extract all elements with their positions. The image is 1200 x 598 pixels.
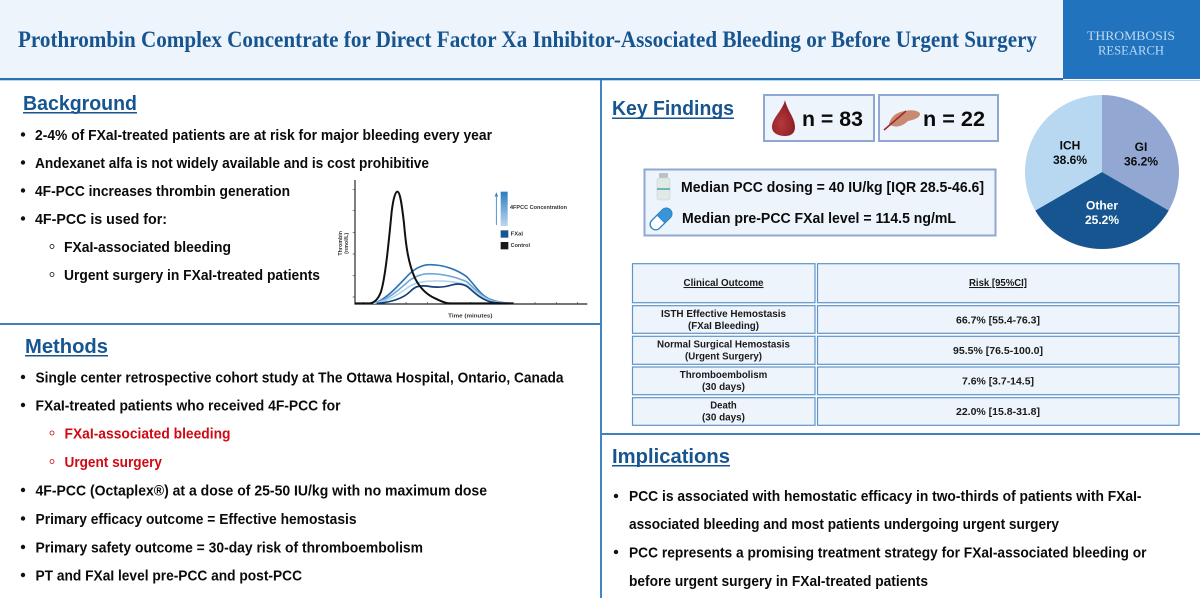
table: clinical outcomes: 7.6% [3.7-14.5]: [962, 376, 1034, 388]
table: clinical outcomes: (Urgent Surgery): [685, 352, 762, 362]
title: Prothrombin Complex Concentrate for Direct Factor Xa Inhibitor-Associated Bleeding or Before Urgent Surgery: [18, 27, 1037, 52]
implications bullets: PCC is associated with hemostatic efficacy in two-thirds of patients with FXaI-: [629, 488, 1142, 505]
legend: 4FPCC Concentration: [510, 205, 567, 211]
panel: implications: [612, 445, 1147, 590]
stat box: surgery n=22: n = 22: [923, 107, 985, 131]
background bullets: Urgent surgery in FXaI-treated patients: [64, 267, 320, 284]
methods bullets: 4F-PCC (Octaplex®) at a dose of 25-50 IU/kg with no maximum dose: [36, 482, 487, 500]
pie chart: bleeding site: ICH: [1060, 138, 1080, 152]
pie chart: bleeding site: Other: [1086, 198, 1118, 212]
legend: FXaI: [511, 231, 524, 237]
chart: thrombin generation curves: [338, 180, 587, 319]
methods bullets: Urgent surgery: [64, 454, 163, 471]
heading: key findings: Key Findings: [612, 97, 734, 120]
stat box: surgery n=22: [879, 95, 998, 141]
stat box: bleeding n=83: n = 83: [802, 107, 863, 131]
heading: implications: Implications: [612, 445, 730, 468]
legend: Control: [511, 243, 531, 249]
methods bullets: Primary efficacy outcome = Effective hemostasis: [36, 511, 356, 528]
methods bullets: Single center retrospective cohort study at The Ottawa Hospital, Ontario, Canada: [36, 370, 564, 386]
implications bullets: PCC represents a promising treatment strategy for FXaI-associated bleeding or: [629, 544, 1147, 562]
table: clinical outcomes: Normal Surgical Hemostasis: [657, 340, 790, 350]
table: clinical outcomes: (FXaI Bleeding): [688, 321, 759, 332]
background bullets: 4F-PCC increases thrombin generation: [35, 183, 290, 200]
pie chart: bleeding site: [1025, 95, 1179, 249]
icon: hand with scalpel: [884, 110, 920, 130]
table: clinical outcomes: (30 days): [702, 382, 745, 393]
table: clinical outcomes: [632, 264, 1179, 425]
panel: methods: [21, 335, 564, 584]
heading: methods: Methods: [25, 335, 108, 358]
header banner: [0, 0, 1200, 81]
table: clinical outcomes: 22.0% [15.8-31.8]: [956, 407, 1040, 418]
panel: key findings: [612, 95, 1179, 425]
background bullets: 4F-PCC is used for:: [35, 211, 167, 228]
background bullets: [21, 127, 492, 284]
table: clinical outcomes: 66.7% [55.4-76.3]: [956, 316, 1040, 326]
pie chart: bleeding site: 38.6%: [1053, 153, 1087, 167]
pie chart: bleeding site: GI: [1135, 140, 1147, 154]
background bullets: FXaI-associated bleeding: [64, 239, 231, 256]
stat box: median dosing and level: [644, 170, 996, 236]
axis labels: Time (minutes): [448, 313, 493, 319]
journal logo: [1087, 28, 1175, 58]
icon: capsule: [648, 206, 674, 232]
stat box: median dosing and level: Median pre-PCC FXaI level = 114.5 ng/mL: [682, 211, 956, 227]
methods bullets: FXaI-treated patients who received 4F-PCC for: [36, 398, 341, 414]
heading: background: Background: [23, 92, 137, 115]
journal logo: RESEARCH: [1098, 42, 1164, 58]
table: clinical outcomes: Thromboembolism: [680, 370, 767, 381]
implications bullets: [614, 488, 1147, 590]
icon: blood drop: [772, 100, 795, 136]
table: clinical outcomes: ISTH Effective Hemostasis: [661, 309, 786, 320]
axis labels: [338, 231, 493, 319]
methods bullets: [21, 370, 564, 584]
icon: vial: [657, 173, 670, 200]
axis labels: Thrombin: [338, 231, 344, 256]
table: clinical outcomes: Risk [95%CI]: [969, 278, 1027, 289]
stat box: median dosing and level: Median PCC dosing = 40 IU/kg [IQR 28.5-46.6]: [681, 180, 984, 196]
implications bullets: before urgent surgery in FXaI-treated patients: [629, 573, 928, 590]
table: clinical outcomes: Death: [710, 400, 737, 412]
implications bullets: associated bleeding and most patients undergoing urgent surgery: [629, 516, 1060, 533]
journal logo: THROMBOSIS: [1087, 28, 1175, 43]
pie chart: bleeding site: 25.2%: [1085, 213, 1119, 227]
stat box: bleeding n=83: [764, 95, 874, 141]
table: clinical outcomes: (30 days): [702, 412, 745, 424]
pie chart: bleeding site: 36.2%: [1124, 154, 1158, 168]
background bullets: 2-4% of FXaI-treated patients are at risk for major bleeding every year: [35, 127, 492, 144]
panel: background: [21, 92, 587, 319]
axis labels: (nmol/L): [344, 233, 350, 254]
methods bullets: PT and FXaI level pre-PCC and post-PCC: [36, 568, 302, 584]
methods bullets: Primary safety outcome = 30-day risk of thromboembolism: [36, 540, 423, 556]
table: clinical outcomes: Clinical Outcome: [684, 278, 764, 289]
legend: [495, 192, 567, 249]
table: clinical outcomes: 95.5% [76.5-100.0]: [953, 346, 1043, 357]
methods bullets: FXaI-associated bleeding: [64, 426, 230, 442]
background bullets: Andexanet alfa is not widely available and is cost prohibitive: [35, 155, 429, 172]
